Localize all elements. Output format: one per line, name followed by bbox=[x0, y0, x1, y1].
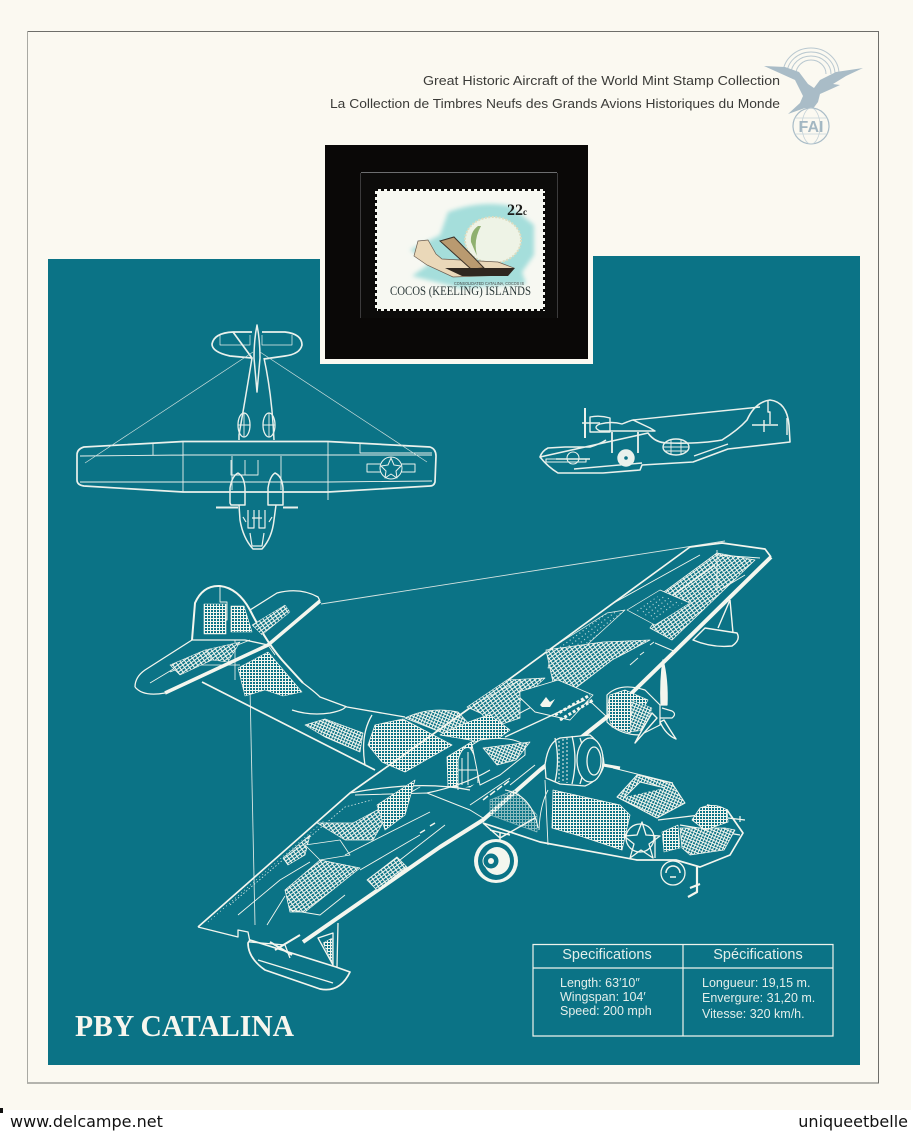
English specifications: Speed: 200 mph bbox=[560, 1004, 652, 1018]
forward hull bbox=[483, 768, 745, 867]
header text: Great Historic Aircraft of the World Mint Stamp Collection bbox=[423, 73, 780, 88]
main cutaway aircraft drawing bbox=[135, 541, 771, 990]
French specifications bbox=[702, 976, 815, 1021]
English specifications bbox=[560, 976, 652, 1018]
roundel bbox=[546, 452, 586, 464]
nose bbox=[239, 505, 276, 549]
aft fuselage bbox=[239, 358, 274, 440]
English specifications: Wingspan: 104′ bbox=[560, 990, 646, 1004]
vertical wire bbox=[250, 688, 255, 925]
fuselage star bbox=[624, 822, 660, 858]
tail bbox=[135, 586, 320, 696]
nacelles bbox=[216, 473, 298, 508]
stamp value: 22c bbox=[507, 202, 527, 219]
main wheel and strut bbox=[474, 818, 535, 883]
French specifications: Envergure: 31,20 m. bbox=[702, 991, 815, 1005]
watermark left: www.delcampe.net bbox=[10, 1112, 163, 1131]
blister bbox=[663, 439, 689, 455]
icon: FAI eagle logo bbox=[764, 48, 863, 144]
far wing float bbox=[693, 600, 738, 646]
bracing wires bbox=[85, 352, 427, 463]
near wing float bbox=[248, 923, 350, 990]
nose wheel and beaching gear bbox=[661, 861, 700, 897]
teal panel bbox=[48, 256, 860, 1065]
stamp caption: CONSOLIDATED CATALINA, COCOS IS bbox=[454, 281, 524, 286]
corner mark bbox=[0, 1108, 3, 1113]
header text bbox=[330, 73, 780, 111]
wheel bbox=[618, 450, 634, 466]
header text: La Collection de Timbres Neufs des Grands Avions Historiques du Monde bbox=[330, 96, 780, 111]
watermark right: uniqueetbelle bbox=[798, 1112, 908, 1131]
nose turret bbox=[692, 805, 728, 830]
wing and engine bbox=[596, 420, 655, 431]
tailplane bbox=[212, 332, 302, 359]
cockpit bbox=[617, 775, 685, 818]
near wing panels bbox=[317, 787, 420, 840]
side view aircraft drawing bbox=[540, 400, 790, 473]
French specifications: Vitesse: 320 km/h. bbox=[702, 1007, 805, 1021]
wire from tail to wingtip bbox=[321, 541, 725, 604]
French specifications: Longueur: 19,15 m. bbox=[702, 976, 810, 990]
French heading: Spécifications bbox=[713, 947, 803, 963]
English specifications: Length: 63′10″ bbox=[560, 976, 640, 990]
English heading: Specifications bbox=[562, 947, 652, 963]
stamp bbox=[375, 189, 545, 311]
wing bbox=[77, 442, 436, 492]
hull bbox=[540, 400, 790, 473]
specifications table bbox=[533, 944, 833, 1036]
top view aircraft drawing bbox=[77, 325, 436, 549]
fin details bbox=[752, 401, 787, 435]
wing structure bbox=[198, 543, 771, 945]
rear fuselage bbox=[202, 682, 470, 772]
stamp country: COCOS (KEELING) ISLANDS bbox=[390, 284, 531, 298]
near engine nacelle bbox=[545, 735, 620, 786]
far engine and propeller bbox=[607, 660, 676, 743]
blisters bbox=[238, 413, 275, 437]
stamp mount bbox=[320, 140, 593, 364]
icon: FAI eagle logo: FAI bbox=[799, 119, 823, 136]
far wing panels bbox=[467, 678, 545, 722]
title: PBY CATALINA bbox=[75, 1008, 295, 1043]
centre section bbox=[473, 680, 520, 727]
roundel bbox=[367, 457, 415, 479]
